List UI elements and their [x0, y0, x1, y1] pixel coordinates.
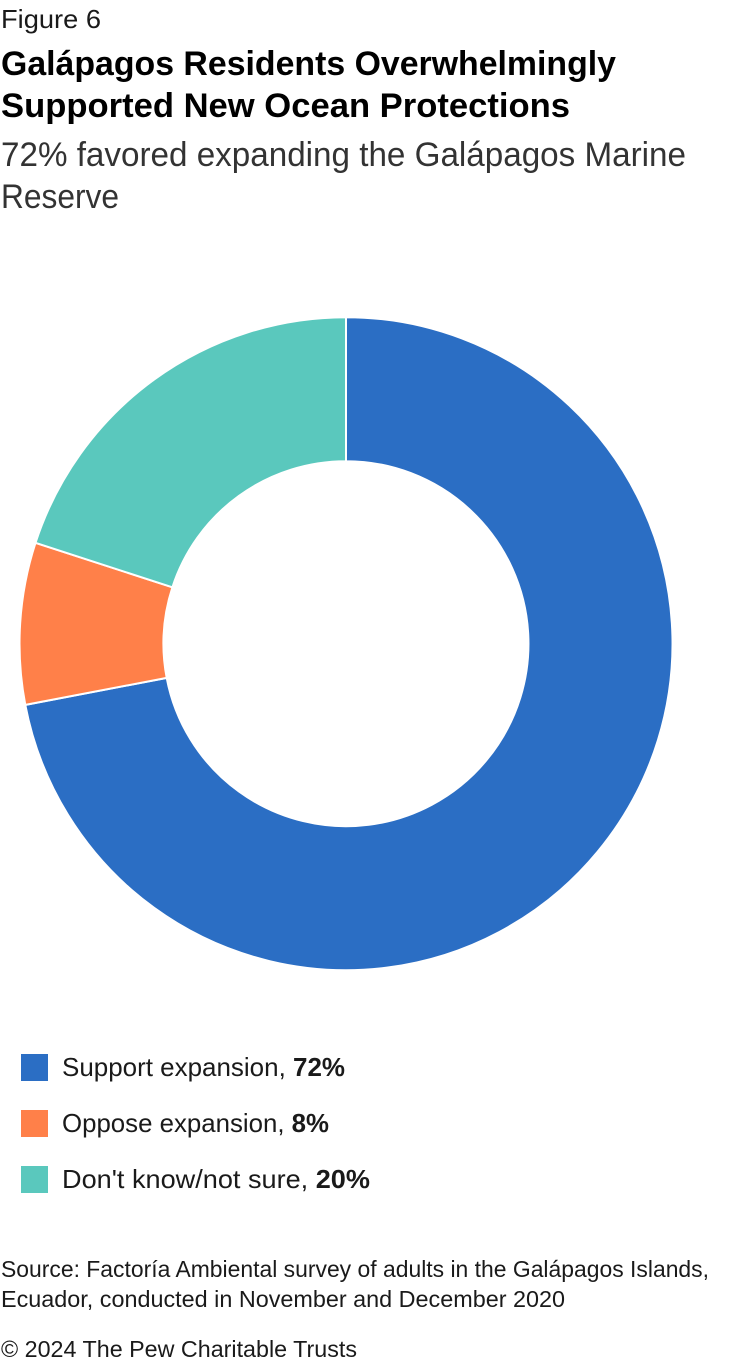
title: Galápagos Residents Overwhelmingly — [1, 45, 616, 83]
donut chart — [20, 317, 673, 970]
subtitle: 72% favored expanding the Galápagos Marine — [1, 136, 686, 174]
legend item: support: Support expansion, 72% — [62, 1052, 345, 1082]
title: Supported New Ocean Protections — [1, 87, 570, 125]
legend — [21, 1052, 370, 1194]
segment: oppose expansion 8% — [20, 543, 172, 705]
copyright: © 2024 The Pew Charitable Trusts — [1, 1336, 357, 1362]
title — [1, 45, 616, 125]
subtitle: Reserve — [1, 178, 119, 216]
source note: Source: Factoría Ambiental survey of adults in the Galápagos Islands, — [1, 1256, 709, 1282]
source note: Ecuador, conducted in November and December 2020 — [1, 1286, 565, 1312]
segment: don't know 20% — [36, 317, 346, 587]
legend item: oppose: Oppose expansion, 8% — [62, 1108, 329, 1138]
figure label: Figure 6 — [1, 4, 101, 34]
subtitle — [1, 136, 686, 216]
segment: support expansion 72% — [25, 317, 673, 970]
source note — [1, 1256, 709, 1312]
legend item: don't know: Don't know/not sure, 20% — [62, 1164, 370, 1194]
